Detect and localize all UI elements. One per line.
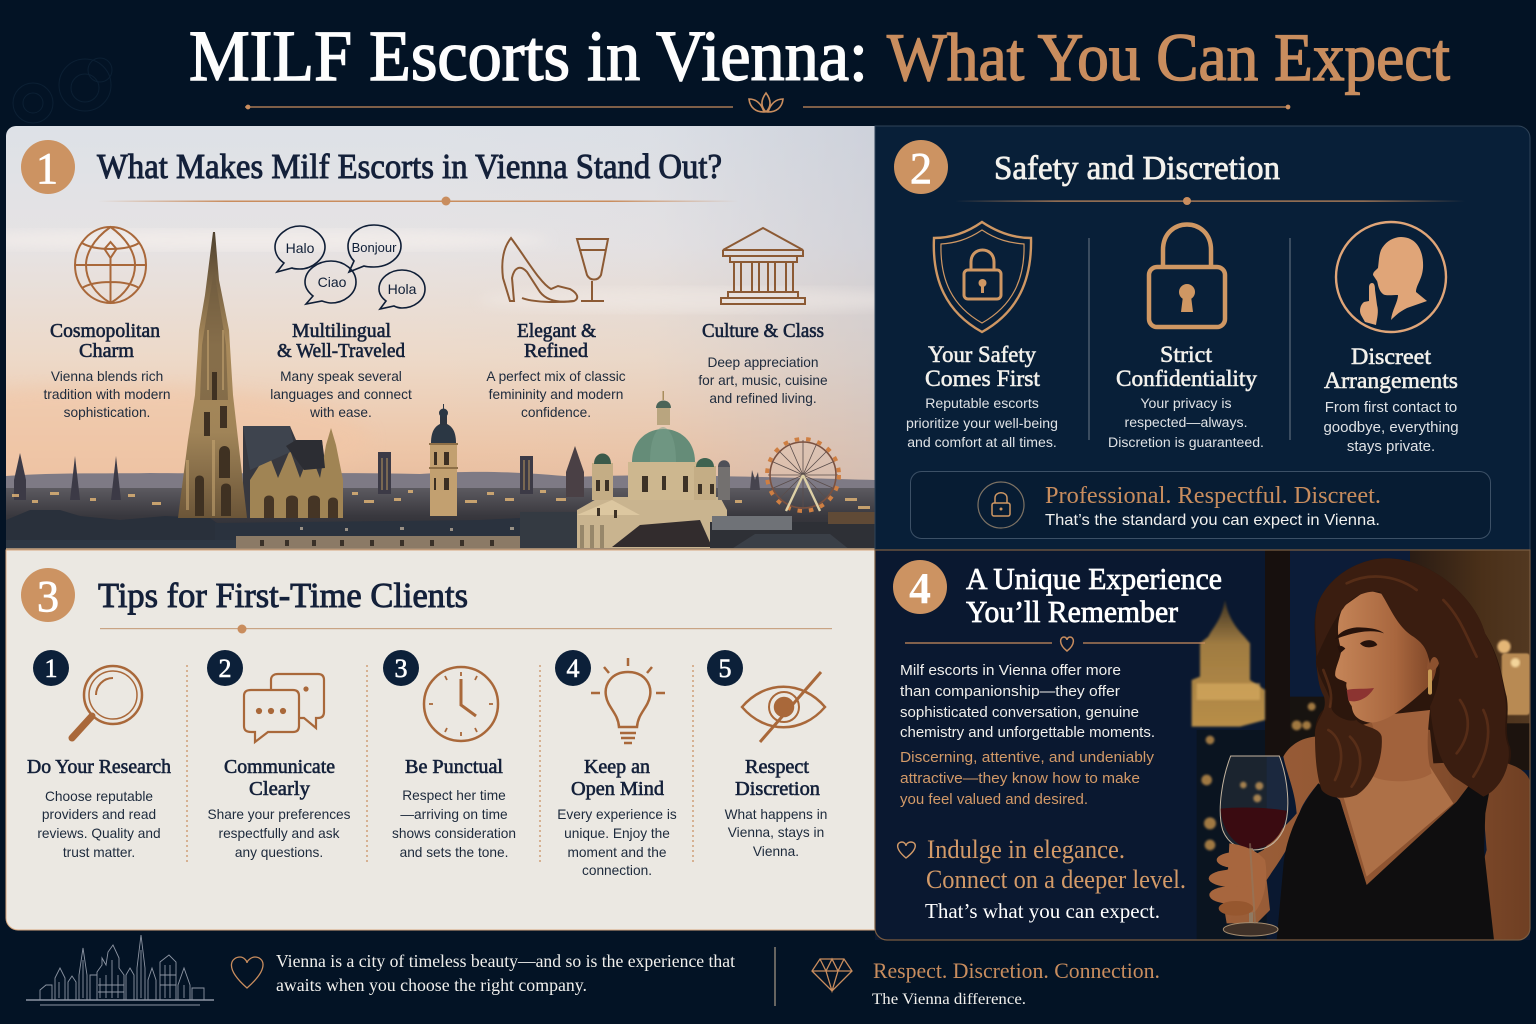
icon: silhouette with finger to lips xyxy=(1336,222,1446,332)
accent text: attractive—they know how to make xyxy=(900,770,1140,787)
shoulders and arms xyxy=(1223,720,1530,940)
step: communicate clearly: respectfully and ask xyxy=(219,826,340,841)
chest highlight xyxy=(1343,763,1453,877)
panel: tips for first-time clients xyxy=(6,550,875,930)
footer: tagline: Respect. Discretion. Connection. xyxy=(873,958,1160,983)
step: be punctual: Respect her time xyxy=(402,788,506,803)
closing statement: Indulge in elegance. xyxy=(927,835,1125,864)
item: your safety: Your Safety xyxy=(928,342,1036,367)
closing statement xyxy=(925,835,1186,923)
icon: crossed-out eye xyxy=(742,672,825,742)
item: culture and class: for art, music, cuisine xyxy=(698,373,828,388)
neck xyxy=(1370,710,1432,781)
footer: message xyxy=(276,951,735,995)
section number 2 xyxy=(894,140,948,194)
item: cosmopolitan charm: Charm xyxy=(79,340,134,362)
step: communicate clearly: Communicate xyxy=(224,756,335,778)
step: do your research: providers and read xyxy=(42,807,156,822)
faint rose ornament xyxy=(13,58,112,123)
back hair xyxy=(1314,558,1511,764)
icon: language bubbles: Bonjour xyxy=(352,240,397,255)
hair over forehead xyxy=(1315,558,1509,797)
window frame, sky and curtains; coordinates below scaled from a 3x working grid xyxy=(1192,550,1530,940)
heading: Safety and Discretion xyxy=(994,150,1280,187)
icon: shield with padlock xyxy=(934,222,1031,332)
step: keep an open mind: unique. Enjoy the xyxy=(564,826,670,841)
baroque church with green dome xyxy=(577,391,730,550)
body text xyxy=(900,662,1155,741)
step: do your research: trust matter. xyxy=(63,845,135,860)
step: be punctual: —arriving on time xyxy=(400,807,508,822)
body text: sophisticated conversation, genuine xyxy=(900,704,1139,721)
section number 4 xyxy=(893,560,947,614)
footer: skyline line art xyxy=(26,935,214,1005)
item: culture and class: and refined living. xyxy=(709,391,817,406)
section number 2: 2 xyxy=(910,144,932,193)
item: discreet arrangements: stays private. xyxy=(1347,438,1435,455)
heading divider xyxy=(98,196,738,206)
step: respect discretion: Vienna, stays in xyxy=(728,825,824,840)
footer: tagline xyxy=(872,958,1160,1008)
step: respect discretion: Discretion xyxy=(735,778,820,800)
heading xyxy=(966,561,1222,629)
step: keep an open mind: Every experience is xyxy=(557,807,677,822)
item: strict confidentiality: Confidentiality xyxy=(1116,366,1257,391)
candle xyxy=(1502,653,1530,715)
roofs and buildings behind the church xyxy=(520,512,580,550)
step: keep an open mind: moment and the xyxy=(568,845,666,860)
item: discreet arrangements: From first contact to xyxy=(1325,399,1457,416)
column separators xyxy=(1089,238,1290,440)
item: strict confidentiality xyxy=(1108,342,1264,450)
item: cosmopolitan charm: Cosmopolitan xyxy=(50,320,160,342)
section number 3 xyxy=(21,568,75,622)
item: multilingual: Many speak several xyxy=(280,369,402,384)
step number badges: 2 xyxy=(218,654,232,683)
item: multilingual: languages and connect xyxy=(270,387,412,402)
eyebrow, eyes and lips xyxy=(1335,627,1384,653)
item: multilingual xyxy=(270,320,412,420)
item: cosmopolitan charm xyxy=(43,320,171,420)
heading: You’ll Remember xyxy=(966,594,1179,629)
icon: large padlock xyxy=(1149,224,1225,327)
item: your safety: Comes First xyxy=(925,366,1041,391)
accent text xyxy=(900,749,1155,808)
item: cosmopolitan charm: Vienna blends rich xyxy=(51,369,163,384)
item: multilingual: & Well-Traveled xyxy=(277,340,405,362)
icon: language bubbles: Ciao xyxy=(318,274,347,290)
title xyxy=(189,16,1450,96)
earring xyxy=(1428,669,1432,695)
item: culture and class xyxy=(698,320,828,406)
step: be punctual xyxy=(392,756,516,860)
St Stephen's spire xyxy=(178,232,247,518)
step number badges: 4 xyxy=(566,654,580,683)
item: multilingual: Multilingual xyxy=(292,320,391,342)
step: do your research: Choose reputable xyxy=(45,789,153,804)
body text: Milf escorts in Vienna offer more xyxy=(900,662,1121,679)
step: communicate clearly: Share your preferences xyxy=(207,807,351,822)
icon: globe xyxy=(75,227,146,303)
icon: language bubbles: Halo xyxy=(286,240,315,256)
panel border xyxy=(875,550,1530,940)
footer: message: awaits when you choose the right company. xyxy=(276,975,587,995)
heading divider xyxy=(955,197,1465,205)
closing statement: Connect on a deeper level. xyxy=(926,865,1186,894)
panel: a unique experience xyxy=(875,550,1530,940)
accent text: Discerning, attentive, and undeniably xyxy=(900,749,1155,766)
step number badges: 5 xyxy=(718,654,732,683)
item: discreet arrangements xyxy=(1323,344,1459,455)
heading divider with heart xyxy=(905,637,1205,651)
item: discreet arrangements: Arrangements xyxy=(1324,368,1458,393)
item: cosmopolitan charm: sophistication. xyxy=(64,405,150,420)
St Stephen's nave xyxy=(243,426,343,518)
step: do your research xyxy=(27,756,171,860)
item: elegant and refined: A perfect mix of classic xyxy=(486,369,626,384)
item: elegant and refined xyxy=(486,320,626,420)
night view and portrait xyxy=(1192,550,1530,940)
skyline illustration xyxy=(0,126,920,550)
icon: magnifying glass xyxy=(72,666,142,738)
item: your safety: and comfort at all times. xyxy=(907,434,1057,450)
ferris wheel xyxy=(767,439,839,511)
item: discreet arrangements: goodbye, everything xyxy=(1323,419,1459,436)
step: respect discretion: Respect xyxy=(745,756,809,778)
distant hills xyxy=(6,472,874,488)
step: respect discretion xyxy=(725,756,827,859)
step: be punctual: shows consideration xyxy=(392,826,516,841)
title: What You Can Expect xyxy=(887,19,1450,95)
footer: heart icon xyxy=(231,957,263,988)
step: be punctual: and sets the tone. xyxy=(400,845,508,860)
heading: Tips for First-Time Clients xyxy=(98,576,468,615)
heading divider xyxy=(100,624,832,634)
item: multilingual: with ease. xyxy=(309,405,372,420)
section number 4: 4 xyxy=(909,564,931,613)
face xyxy=(1335,590,1437,723)
item: elegant and refined: femininity and modern xyxy=(489,387,623,402)
hand with fingers xyxy=(1209,843,1266,916)
callout: professional, respectful, discreet: Professional. Respectful. Discreet. xyxy=(1045,483,1381,509)
ear xyxy=(1428,657,1439,670)
item: elegant and refined: Refined xyxy=(524,340,588,362)
item: strict confidentiality: respected—always. xyxy=(1125,414,1247,430)
step: do your research: Do Your Research xyxy=(27,756,171,778)
panel: what makes them stand out xyxy=(0,126,920,550)
icon: clock xyxy=(424,667,498,741)
step: respect discretion: Vienna. xyxy=(753,844,799,859)
item: strict confidentiality: Your privacy is xyxy=(1140,395,1232,411)
title divider ornament xyxy=(245,93,1290,112)
item: cosmopolitan charm: tradition with modern xyxy=(43,387,171,402)
heading: A Unique Experience xyxy=(966,561,1222,596)
stem and foot xyxy=(1249,848,1253,923)
accent text: you feel valued and desired. xyxy=(900,791,1088,808)
item: elegant and refined: Elegant & xyxy=(517,320,596,342)
black dress xyxy=(1276,783,1494,940)
icon: heart xyxy=(898,842,915,858)
panel edge xyxy=(6,548,874,550)
icon: classical temple xyxy=(721,228,805,304)
step: do your research: reviews. Quality and xyxy=(37,826,161,841)
footer: message: Vienna is a city of timeless beauty—and so is the experience that xyxy=(276,951,735,971)
icon: high heel and glass xyxy=(502,238,608,302)
item: discreet arrangements: Discreet xyxy=(1351,344,1432,369)
section number 3: 3 xyxy=(37,572,59,621)
footer: divider xyxy=(774,947,776,1006)
mansard roofs xyxy=(6,510,216,540)
item: strict confidentiality: Strict xyxy=(1160,342,1213,367)
step: keep an open mind: Keep an xyxy=(584,756,650,778)
footer: diamond icon xyxy=(812,959,852,991)
distant towers xyxy=(14,446,760,500)
title: MILF Escorts in Vienna: xyxy=(189,16,868,96)
body text: chemistry and unforgettable moments. xyxy=(900,724,1155,741)
section number 1: 1 xyxy=(36,144,58,193)
city lights xyxy=(12,490,870,509)
item: your safety: Reputable escorts xyxy=(925,395,1039,411)
step: respect discretion: What happens in xyxy=(725,807,827,822)
step: keep an open mind: connection. xyxy=(582,863,652,878)
item: culture and class: Culture & Class xyxy=(702,320,824,342)
closing statement: That’s what you can expect. xyxy=(925,899,1160,923)
step number badges: 3 xyxy=(394,654,408,683)
footer: tagline: The Vienna difference. xyxy=(872,991,1026,1008)
item: elegant and refined: confidence. xyxy=(521,405,591,420)
glowing palace xyxy=(1192,600,1265,727)
section number 1 xyxy=(21,140,75,194)
facades along the foreground xyxy=(236,536,520,548)
item: strict confidentiality: Discretion is guaranteed. xyxy=(1108,434,1264,450)
callout: professional, respectful, discreet xyxy=(910,472,1490,538)
bell tower xyxy=(429,404,458,516)
item: your safety: prioritize your well-being xyxy=(906,415,1058,431)
item: culture and class: Deep appreciation xyxy=(707,355,819,370)
heading: What Makes Milf Escorts in Vienna Stand Out? xyxy=(97,147,722,186)
step: keep an open mind: Open Mind xyxy=(571,778,664,800)
body text: than companionship—they offer xyxy=(900,683,1120,700)
step: communicate clearly: Clearly xyxy=(249,778,310,800)
step number badges: 1 xyxy=(44,654,58,683)
step: keep an open mind xyxy=(557,756,677,878)
icon: chat bubbles xyxy=(244,674,324,742)
callout: professional, respectful, discreet: That’s the standard you can expect in Vienna. xyxy=(1045,512,1380,529)
icon: language bubbles: Hola xyxy=(388,281,417,297)
step: be punctual: Be Punctual xyxy=(405,756,503,778)
icon: light bulb xyxy=(591,658,665,743)
hair highlights xyxy=(1323,577,1488,787)
water and city bokeh xyxy=(1201,703,1316,850)
city band xyxy=(6,488,874,523)
icon: language bubbles xyxy=(275,225,425,309)
dotted column separators xyxy=(187,665,693,865)
step number badges xyxy=(33,650,743,686)
foreground rooftops right xyxy=(710,512,875,550)
left curl xyxy=(1315,657,1382,798)
wine glass bowl xyxy=(1220,756,1288,850)
panel: safety and discretion xyxy=(875,126,1530,550)
item: your safety xyxy=(906,342,1058,450)
step: communicate clearly xyxy=(207,756,351,860)
step: communicate clearly: any questions. xyxy=(235,845,323,860)
